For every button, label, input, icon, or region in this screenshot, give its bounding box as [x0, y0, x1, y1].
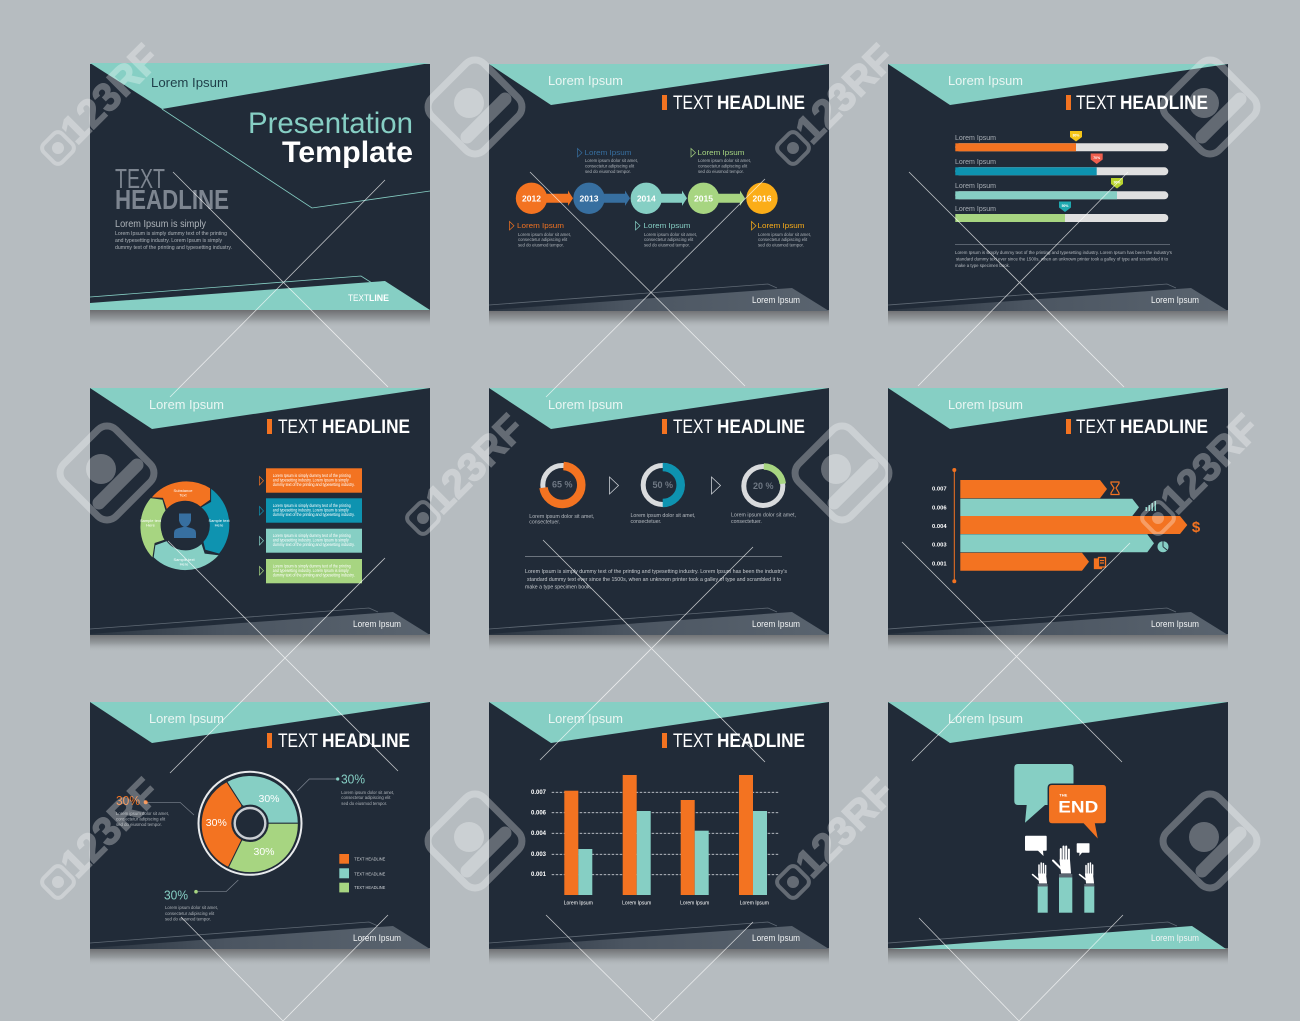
donut captions: Lorem ipsum dolor sit amet, — [630, 513, 696, 519]
ring labels: Here — [180, 562, 189, 566]
headline: HEADLINE — [1120, 417, 1208, 438]
footer label: TEXT — [348, 293, 369, 303]
bar chart — [531, 775, 778, 906]
top label: Lorem Ipsum — [548, 397, 623, 412]
intro text block: Lorem Ipsum is simply dummy text of the printing — [115, 231, 227, 237]
panel: bar chart slide — [489, 702, 829, 966]
panel: progress bars slide — [888, 64, 1228, 328]
headline: TEXT — [673, 731, 713, 752]
bar chart: 0.004 — [531, 831, 547, 837]
donut captions: Lorem ipsum dolor sit amet, — [529, 514, 594, 520]
timeline nodes: 2015 — [694, 193, 713, 203]
list box 2: dummy text of the printing and typesetting industry. — [273, 512, 355, 517]
bar chart: Lorem Ipsum — [622, 900, 651, 906]
list box 3: Lorem Ipsum is simply dummy text of the printing — [273, 533, 351, 538]
label 2013: sed do eiusmod tempor. — [585, 169, 631, 174]
icon: white speech bubbles — [1025, 836, 1090, 856]
label 2014: consectetur adipiscing elit — [644, 237, 694, 242]
bar chart: 0.007 — [531, 790, 547, 796]
watermark: logo row one right — [775, 130, 811, 166]
list box 1: and typesetting industry. Lorem Ipsum is simply — [273, 478, 349, 483]
title: Template — [282, 136, 413, 169]
donut 50 percent — [643, 466, 682, 504]
label 2016: Lorem Ipsum — [758, 221, 804, 230]
body text: make a type specimen book. — [955, 263, 1010, 269]
icon: documents — [1094, 558, 1106, 568]
pie chart — [198, 772, 302, 875]
body text: make a type specimen book. — [525, 584, 591, 590]
label 2012 — [510, 221, 571, 248]
percentage markers — [1059, 131, 1123, 212]
icon: raised hands — [1032, 846, 1094, 913]
progress bars: Lorem Ipsum — [955, 206, 996, 213]
intro text block: dummy text of the printing and typesetting industry. — [115, 245, 232, 251]
panel: arrow bars slide — [888, 388, 1228, 652]
list box 4: dummy text of the printing and typesetting industry. — [273, 573, 355, 578]
list box 2: Lorem Ipsum is simply dummy text of the printing — [273, 503, 351, 508]
percentage markers: 80% — [1073, 134, 1079, 138]
top label: Lorem Ipsum — [548, 711, 623, 726]
percentage markers: 50% — [1062, 204, 1068, 208]
pie chart: 30% — [253, 846, 275, 858]
bar chart: 0.003 — [531, 852, 547, 858]
callout left: sed do eiusmod tempor. — [116, 822, 162, 827]
label 2012: sed do eiusmod tempor. — [518, 242, 564, 248]
bar chart: Lorem Ipsum — [740, 900, 769, 906]
label 2015: Lorem Ipsum — [698, 148, 744, 157]
label 2016: Lorem ipsum dolor sit amet, — [758, 232, 811, 237]
label 2016 — [752, 221, 811, 248]
footer label: Lorem Ipsum — [353, 933, 401, 943]
progress bars — [955, 135, 1168, 222]
top label: Lorem Ipsum — [948, 73, 1023, 88]
icon: dollar: $ — [1192, 519, 1201, 536]
axis labels — [932, 486, 947, 568]
body text: standard dummy text ever since the 1500s, when an unknown printer took a galley of type and scrambled it to — [956, 256, 1168, 262]
list box 1: dummy text of the printing and typesetting industry. — [273, 482, 355, 487]
progress bars: Lorem Ipsum — [955, 159, 996, 166]
axis — [952, 468, 956, 583]
timeline nodes: 2016 — [753, 193, 772, 203]
timeline nodes — [516, 183, 778, 214]
watermark: crossing lines — [168, 172, 1130, 1021]
callout left — [116, 793, 194, 827]
progress bars: Lorem Ipsum — [955, 183, 996, 190]
ring labels: Text — [179, 492, 188, 498]
callout bottom: 30% — [164, 887, 188, 902]
list box 2: and typesetting industry. Lorem Ipsum is simply — [273, 508, 349, 513]
bar chart: Lorem Ipsum — [564, 900, 593, 906]
donut 50 percent: 50 % — [652, 480, 673, 490]
headline: TEXT — [673, 93, 713, 114]
panel: title slide — [90, 63, 430, 328]
headline: HEADLINE — [717, 731, 805, 752]
bar chart: 0.001 — [531, 872, 547, 878]
label 2016: consectetur adipiscing elit — [758, 237, 808, 242]
label 2012: Lorem ipsum dolor sit amet, — [518, 232, 571, 237]
watermark: logo row three right — [775, 864, 811, 900]
list box 1 — [260, 468, 362, 493]
headline — [267, 417, 410, 438]
ring labels: Sample text — [208, 518, 230, 523]
callout right: Lorem ipsum dolor sit amet, — [341, 790, 394, 795]
donut 65 percent: 65 % — [552, 480, 573, 490]
bar chart: Lorem Ipsum — [680, 900, 709, 906]
title — [248, 107, 413, 169]
watermark text: 123RF — [787, 770, 903, 886]
icon: pie — [1158, 541, 1168, 552]
icon: teal speech bubble — [1014, 764, 1074, 823]
label 2014: Lorem ipsum dolor sit amet, — [644, 232, 697, 237]
donut captions: Lorem ipsum dolor sit amet, — [731, 512, 796, 518]
panel: donut gauges slide — [489, 388, 829, 652]
panel: pie chart slide — [90, 702, 430, 966]
donut 20 percent — [744, 466, 783, 506]
list box 1: Lorem Ipsum is simply dummy text of the printing — [273, 473, 351, 478]
watermark: logo row two right — [1140, 500, 1176, 536]
donut captions — [529, 512, 796, 526]
pie chart: 30% — [258, 793, 280, 805]
footer label — [348, 293, 389, 303]
ring labels: Substance — [174, 488, 193, 493]
callout left: consectetur adipiscing elit — [116, 816, 166, 822]
percentage markers: 70% — [1093, 156, 1100, 160]
label 2015 — [691, 148, 751, 174]
legend: TEXT HEADLINE — [354, 856, 385, 862]
callout left: 30% — [116, 793, 140, 808]
title: Presentation — [248, 107, 413, 140]
label 2014: Lorem Ipsum — [644, 221, 690, 230]
watermark text: 123RF — [787, 36, 903, 152]
legend: TEXT HEADLINE — [354, 885, 385, 890]
timeline nodes: 2014 — [637, 193, 656, 203]
timeline nodes: 2013 — [580, 193, 599, 203]
intro text block: and typesetting industry. Lorem Ipsum is simply — [115, 238, 223, 244]
icon: bars — [1146, 501, 1156, 511]
label 2015: Lorem ipsum dolor sit amet, — [698, 158, 751, 163]
headline — [1066, 417, 1208, 438]
headline: TEXT — [278, 731, 318, 752]
headline: TEXT — [1076, 93, 1116, 114]
footer label: Lorem Ipsum — [752, 933, 800, 943]
label 2014 — [636, 221, 697, 248]
axis labels: 0.006 — [932, 505, 947, 511]
watermark text: 123RF — [417, 406, 533, 522]
callout bottom: Lorem ipsum dolor sit amet, — [165, 905, 218, 910]
headline: HEADLINE — [1120, 93, 1208, 114]
footer label: Lorem Ipsum — [752, 295, 800, 305]
callout bottom: consectetur adipiscing elit — [165, 911, 215, 916]
footer label: Lorem Ipsum — [1151, 295, 1199, 305]
cycle ring — [140, 481, 230, 570]
callout right: sed do eiusmod tempor. — [341, 801, 387, 806]
percentage markers: 90% — [1114, 180, 1120, 184]
top label: Lorem Ipsum — [948, 711, 1023, 726]
callout left: Lorem ipsum dolor sit amet, — [116, 811, 169, 816]
text headline: HEADLINE — [115, 184, 229, 215]
arrow — [712, 477, 720, 494]
donut captions: consectetuer. — [630, 519, 661, 525]
headline — [662, 417, 805, 438]
icon: person — [174, 514, 196, 538]
callout bottom — [164, 880, 238, 922]
headline: TEXT — [1076, 417, 1116, 438]
arrow — [610, 477, 618, 494]
icon: the end speech bubble — [1048, 784, 1107, 841]
label 2015: consectetur adipiscing elit — [698, 164, 748, 168]
list box 4: and typesetting industry. Lorem Ipsum is simply — [273, 568, 349, 573]
label 2014: sed do eiusmod tempor. — [644, 242, 690, 248]
footer label: Lorem Ipsum — [353, 619, 401, 629]
legend: TEXT HEADLINE — [354, 872, 385, 876]
ring labels: Sample text — [140, 518, 162, 523]
watermark: logo row one left — [40, 130, 76, 166]
headline: HEADLINE — [717, 93, 805, 114]
watermark text: 123RF — [52, 770, 168, 886]
legend — [339, 854, 385, 892]
list box 4 — [260, 559, 362, 583]
list box 3: and typesetting industry. Lorem Ipsum is simply — [273, 538, 349, 543]
headline: TEXT — [278, 417, 318, 438]
label 2012: consectetur adipiscing elit — [518, 237, 568, 242]
callout bottom: sed do eiusmod tempor. — [165, 916, 211, 922]
list box 3: dummy text of the printing and typesetting industry. — [273, 542, 355, 547]
donut captions: consectetuer. — [529, 520, 560, 526]
top label: Lorem Ipsum — [149, 397, 224, 412]
top label: Lorem Ipsum — [948, 397, 1023, 412]
body text — [955, 250, 1173, 269]
footer label: Lorem Ipsum — [752, 619, 800, 629]
axis labels: 0.004 — [932, 524, 947, 530]
icon: hourglass — [1111, 482, 1119, 494]
headline — [267, 731, 410, 752]
timeline nodes: 2012 — [522, 193, 541, 203]
donut captions: consectetuer. — [731, 519, 762, 525]
list box 2 — [260, 498, 362, 523]
ring labels: Here — [215, 522, 224, 528]
panel: timeline slide — [489, 64, 829, 328]
label 2016: sed do eiusmod tempor. — [758, 242, 804, 248]
body text: Lorem Ipsum is simply dummy text of the printing and typesetting industry. Lorem Ipsum has been the industry's — [955, 250, 1173, 256]
panel: the end slide — [888, 702, 1228, 966]
progress bars: Lorem Ipsum — [955, 135, 996, 142]
text headline: TEXT — [115, 163, 165, 194]
panel: cycle diagram slide — [90, 388, 430, 652]
timeline arrows — [545, 190, 745, 206]
footer label: Lorem Ipsum — [1151, 619, 1199, 629]
headline: HEADLINE — [322, 731, 410, 752]
arrow bars — [960, 480, 1187, 571]
body text: standard dummy text ever since the 1500s, when an unknown printer took a galley of type and scrambled it to — [527, 577, 781, 583]
icon: the end speech bubble: THE — [1059, 793, 1068, 798]
headline: HEADLINE — [717, 417, 805, 438]
label 2012: Lorem Ipsum — [517, 221, 564, 230]
watermark text: 123RF — [1152, 406, 1268, 522]
axis labels: 0.001 — [932, 562, 947, 568]
top label: Lorem Ipsum — [151, 75, 228, 90]
ring labels — [140, 488, 230, 566]
label 2013: consectetur adipiscing elit — [585, 164, 635, 168]
pie chart: 30% — [206, 817, 227, 829]
label 2013: Lorem ipsum dolor sit amet, — [585, 158, 638, 163]
list box 3 — [260, 529, 362, 553]
top label: Lorem Ipsum — [548, 73, 623, 88]
watermark: logo row two left — [405, 500, 441, 536]
callout right: 30% — [341, 771, 365, 786]
label 2013: Lorem Ipsum — [584, 148, 632, 157]
list box 4: Lorem Ipsum is simply dummy text of the printing — [273, 564, 351, 569]
body text: Lorem Ipsum is simply dummy text of the printing and typesetting industry. Lorem Ipsum has been the industry's — [525, 569, 787, 575]
body text — [525, 569, 787, 590]
callout right: consectetur adipiscing elit — [341, 795, 391, 800]
intro text block — [115, 218, 232, 251]
icon: the end speech bubble: END — [1058, 797, 1098, 816]
callout right — [297, 771, 394, 806]
axis labels: 0.003 — [932, 543, 947, 549]
headline — [662, 731, 805, 752]
text headline — [115, 163, 229, 215]
footer label: LINE — [369, 293, 389, 303]
watermark: logo row three left — [40, 864, 76, 900]
ring labels: Sample text — [173, 557, 195, 562]
watermark: egg icons — [55, 55, 1262, 893]
intro text block: Lorem Ipsum is simply — [115, 218, 207, 230]
headline: TEXT — [673, 417, 713, 438]
headline — [1066, 93, 1208, 114]
label 2015: sed do eiusmod tempor. — [698, 169, 744, 174]
axis labels: 0.007 — [932, 486, 947, 492]
headline — [662, 93, 805, 114]
top label: Lorem Ipsum — [149, 711, 224, 726]
bar chart: 0.006 — [531, 810, 547, 816]
headline: HEADLINE — [322, 417, 410, 438]
ring labels: Here — [146, 522, 156, 528]
donut 20 percent: 20 % — [753, 481, 774, 491]
footer label: Lorem Ipsum — [1151, 933, 1199, 943]
donut 65 percent — [543, 466, 582, 504]
watermark text: 123RF — [52, 36, 168, 152]
label 2013 — [578, 148, 638, 174]
